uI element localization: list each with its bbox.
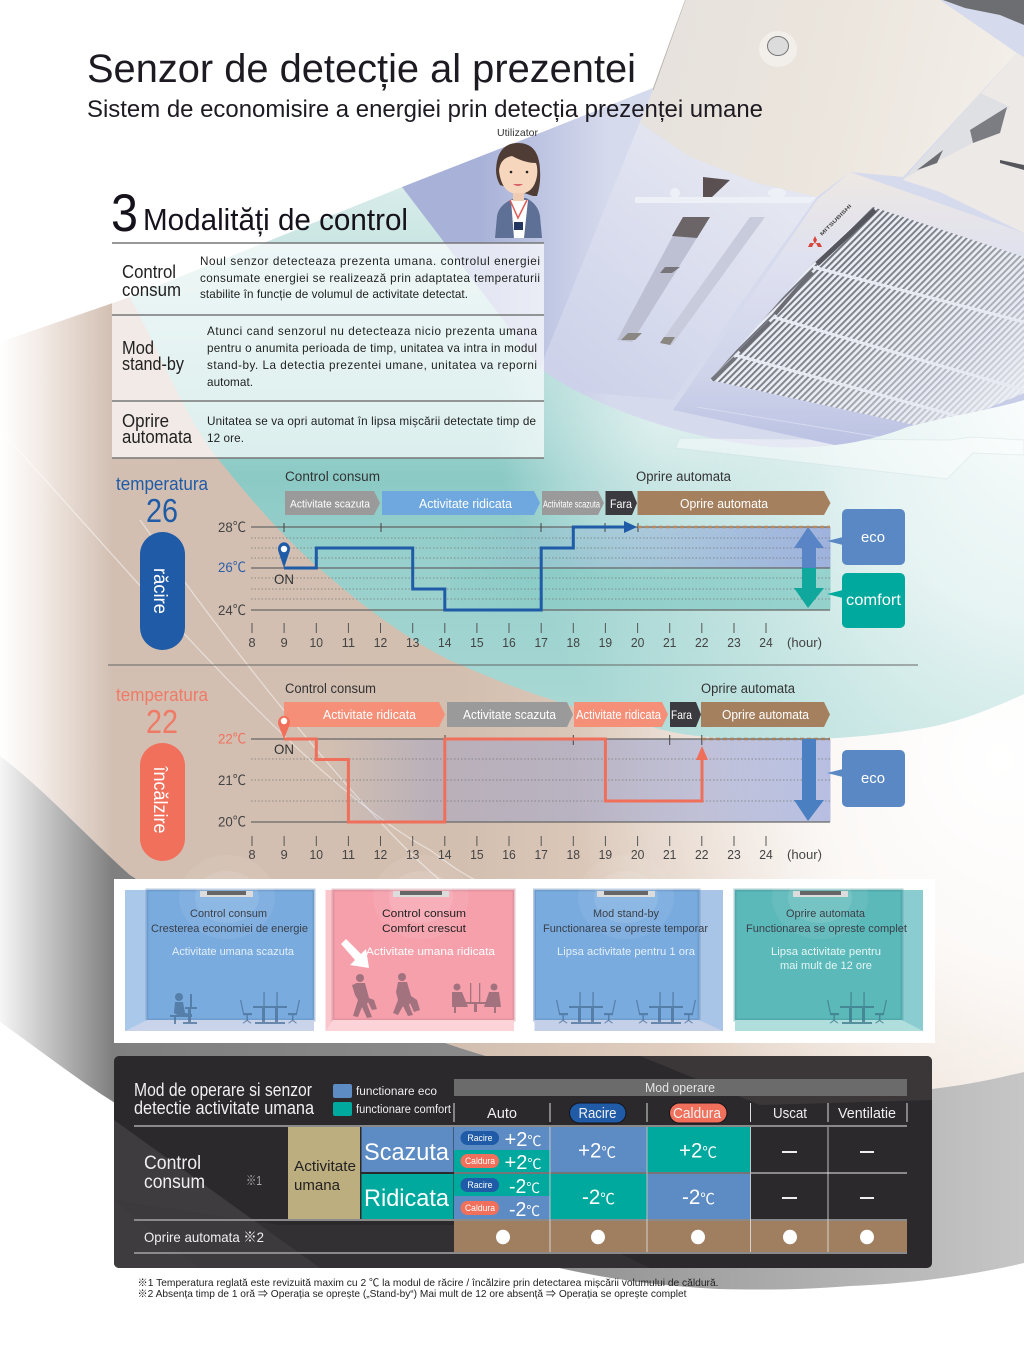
- row: control consum: Noul senzor detecteaza prezenta umana. controlul energiei: [200, 255, 540, 268]
- louver panel: [544, 122, 816, 382]
- logo: [808, 203, 854, 247]
- cooling and heating cells: +2℃: [679, 1140, 717, 1162]
- hour axis: 21: [663, 847, 676, 862]
- activity level cells: Scazuta: [364, 1139, 450, 1166]
- teal highlight below cone: [490, 250, 830, 590]
- meeting group: [452, 983, 501, 1013]
- beige highlight: [560, 330, 1024, 1100]
- lower face seams: [697, 406, 878, 437]
- header bar: mod operare: Mod operare: [645, 1080, 715, 1095]
- hour axis: 23: [727, 847, 741, 862]
- hour axis: 18: [567, 635, 580, 650]
- hour axis: 21: [663, 635, 676, 650]
- legend: functionare comfort: [356, 1104, 452, 1116]
- hour axis: 19: [599, 635, 612, 650]
- auto column cells: [454, 1127, 550, 1221]
- row: oprire automata: Oprire: [122, 411, 169, 431]
- hour axis: 12: [374, 635, 387, 650]
- label: temperature 22 heating: [116, 685, 209, 861]
- column headers: Caldura: [673, 1105, 722, 1122]
- hour axis: 24: [759, 635, 773, 650]
- grille cross bars: [735, 267, 1024, 425]
- table title: detectie activitate umana: [134, 1098, 315, 1118]
- footnotes: ※1 Temperatura reglată este revizuită maxim cu 2 ℃ la modul de răcire / încălzire prin detectarea mișcării volumului de căldură.: [138, 1277, 718, 1289]
- room: automatic stop: Oprire automata: [786, 908, 866, 920]
- on label: ON: [274, 741, 294, 757]
- auto column cells: -2℃: [509, 1176, 540, 1198]
- hour axis: (hour): [787, 635, 822, 650]
- hour axis: 10: [310, 847, 323, 862]
- header bar: mod operare: [454, 1079, 907, 1096]
- slot right: [660, 217, 765, 345]
- temperature step line: [284, 739, 708, 822]
- activity arrows: [284, 702, 830, 727]
- right cream panel: [903, 53, 1024, 233]
- callout: comfort: comfort: [846, 592, 902, 609]
- hour axis: 13: [406, 635, 419, 650]
- column headers: [454, 1103, 907, 1123]
- callout: comfort: [827, 573, 905, 628]
- chart headers: [285, 681, 795, 696]
- auto column cells: Racire: [468, 1133, 492, 1144]
- hour axis: 14: [438, 847, 452, 862]
- dark first slat: [817, 210, 875, 264]
- activity arrows: [285, 491, 830, 515]
- room: stand-by: Functionarea se opreste temporar: [543, 923, 708, 935]
- hour axis: 8: [248, 847, 256, 862]
- column headers: Ventilatie: [838, 1105, 896, 1122]
- auto column cells: +2℃: [504, 1129, 542, 1151]
- activity arrows: Activitate scazuta: [543, 500, 600, 510]
- panel: control modes table: [112, 243, 544, 458]
- top right dark interior: [943, 0, 1024, 25]
- activity level cells: Ridicata: [364, 1185, 450, 1212]
- label: temperature 26 cooling: răcire: [149, 568, 170, 614]
- temperature labels: 20℃: [218, 814, 246, 830]
- dashed brown line: [638, 526, 830, 528]
- label: temperature 22 heating: temperatura: [116, 685, 209, 705]
- logo: MITSUBISHI: [819, 203, 854, 237]
- dashed brown line: [702, 738, 830, 740]
- footnotes: ※2 Absența timp de 1 oră ⇒ Operația se oprește („Stand-by“) Mai mult de 12 ore absență ⇒ Operația se oprește complet: [138, 1288, 687, 1300]
- hour axis: 11: [342, 635, 355, 650]
- temperature labels: 21℃: [218, 772, 246, 788]
- hour axis: [248, 836, 822, 862]
- column headers: Racire: [578, 1105, 616, 1122]
- room: low activity: Control consum: [190, 908, 267, 920]
- row: oprire automata: Unitatea se va opri automat în lipsa mișcării detectate timp de: [207, 415, 536, 428]
- icon: user woman: [495, 143, 542, 238]
- row: mod stand-by: pentru o anumita perioada de timp, unitatea va intra in modul: [207, 342, 537, 355]
- hour axis: 14: [438, 635, 452, 650]
- chart headers: Control consum: [285, 681, 376, 696]
- human activity cell: [288, 1127, 360, 1219]
- main title: Senzor de detecție al prezentei: [87, 47, 636, 91]
- chart headers: [285, 469, 731, 484]
- row labels: ※1: [246, 1173, 262, 1188]
- cooling and heating cells: [550, 1127, 750, 1219]
- on label: ON: [274, 571, 294, 587]
- activity arrows: Activitate ridicata: [419, 496, 513, 511]
- temperature labels: 22℃: [218, 730, 246, 746]
- section heading: 3 control modes: 3: [111, 184, 138, 243]
- cooling and heating cells: -2℃: [582, 1186, 615, 1209]
- icon: on pin: [278, 716, 290, 739]
- row: control consum: Control: [122, 262, 176, 282]
- row labels: Control: [144, 1153, 201, 1174]
- temperature labels: [218, 519, 246, 618]
- arrow: eco comfort double arrow: [794, 527, 824, 608]
- activity arrows: Activitate ridicata: [323, 707, 417, 722]
- dark opening: [703, 177, 730, 197]
- temperature labels: 28℃: [218, 519, 246, 535]
- air conditioner cassette unit: [540, 0, 1024, 479]
- main face: [673, 172, 1024, 470]
- arrow: eco down arrow: [794, 739, 824, 821]
- legend: [333, 1084, 452, 1116]
- activity arrows: Oprire automata: [680, 496, 769, 511]
- oprire automata row: Oprire automata ※2: [144, 1229, 264, 1245]
- hour axis: 23: [727, 635, 741, 650]
- section heading: 3 control modes: Modalități de control: [143, 202, 408, 237]
- row labels: [144, 1153, 262, 1193]
- user label: Utilizator: [497, 127, 539, 139]
- hour axis: 20: [631, 635, 644, 650]
- footnotes: [138, 1277, 718, 1300]
- temperature step line: [284, 521, 637, 610]
- hour axis: 22: [695, 847, 709, 862]
- callout: eco: eco: [861, 530, 885, 546]
- lower lip: [675, 437, 1024, 479]
- row: oprire automata: [122, 411, 536, 447]
- room: automatic stop: [735, 855, 923, 1031]
- right panel slot: [905, 93, 1010, 178]
- eco band: [330, 739, 830, 822]
- row: oprire automata: 12 ore.: [207, 432, 244, 445]
- label: temperature 26 cooling: temperatura: [116, 474, 209, 494]
- activity arrows: Activitate scazuta: [290, 498, 371, 510]
- hour axis: 16: [502, 635, 516, 650]
- slot left: [617, 217, 710, 342]
- room: stand-by: Lipsa activitate pentru 1 ora: [557, 946, 696, 958]
- room: high activity: Comfort crescut: [382, 923, 466, 935]
- chart headers: Control consum: [285, 469, 380, 484]
- hour axis: 11: [342, 847, 355, 862]
- row labels: consum: [144, 1172, 205, 1193]
- temperature labels: [218, 730, 246, 830]
- room: high activity: [326, 855, 514, 1031]
- grille fade: [724, 218, 1024, 425]
- panel: room scenes: [114, 855, 935, 1043]
- section heading: 3 control modes: [111, 184, 408, 243]
- room: high activity: Activitate umana ridicata: [366, 946, 496, 958]
- walking people: [352, 973, 420, 1018]
- row: mod stand-by: stand-by: [122, 354, 184, 374]
- row: mod stand-by: stand-by. La detectia prezentei umane, unitatea va reporni: [207, 359, 537, 372]
- activity arrows: Fara: [671, 708, 692, 722]
- room: automatic stop: Lipsa activitate pentru: [771, 946, 881, 958]
- temperature labels: 26℃: [218, 559, 246, 575]
- row: mod stand-by: Atunci cand senzorul nu detecteaza nicio prezenta umana: [207, 325, 537, 338]
- callout: eco: [827, 509, 905, 565]
- white arcs: [0, 430, 530, 888]
- hour axis: 8: [248, 635, 256, 650]
- sensor: [759, 31, 797, 67]
- comfort and eco bands: [450, 527, 830, 610]
- auto column cells: Racire: [468, 1180, 492, 1191]
- row: mod stand-by: Mod: [122, 338, 154, 358]
- auto column cells: Caldura: [465, 1203, 496, 1214]
- auto column cells: +2℃: [504, 1152, 542, 1174]
- hour axis: 13: [406, 847, 419, 862]
- activity arrows: Activitate ridicata: [576, 707, 662, 722]
- louver knobs: [670, 188, 786, 198]
- cooling and heating cells: -2℃: [682, 1186, 715, 1209]
- hour axis: 12: [374, 847, 387, 862]
- column headers: Auto: [487, 1105, 517, 1122]
- hour axis: 9: [280, 635, 288, 650]
- row: control consum: consum: [122, 280, 181, 300]
- callout: eco: [827, 750, 905, 807]
- hour axis: (hour): [787, 847, 822, 862]
- chart headers: Oprire automata: [701, 681, 795, 696]
- room: automatic stop: Functionarea se opreste complet: [746, 923, 907, 935]
- row: control consum: stabilite în funcție de volumul de activitate detectat.: [200, 288, 468, 301]
- room: stand-by: Mod stand-by: [593, 908, 659, 920]
- row: mod stand-by: automat.: [207, 376, 253, 389]
- gray swoosh: [0, 756, 1024, 1290]
- row: mod stand-by: [122, 325, 537, 389]
- room: automatic stop: mai mult de 12 ore: [780, 960, 872, 972]
- hour axis: 15: [470, 847, 484, 862]
- panel: operating mode table: [114, 1056, 932, 1268]
- activity arrows: Oprire automata: [722, 707, 810, 722]
- icon: on pin: [278, 542, 290, 568]
- oprire automata row: [144, 1220, 907, 1252]
- row: control consum: [122, 255, 540, 301]
- auto column cells: Caldura: [465, 1156, 496, 1167]
- hour axis: [248, 623, 822, 650]
- louver frame bar: [635, 197, 817, 203]
- room: low activity: Cresterea economiei de energie: [151, 923, 308, 935]
- label: temperature 26 cooling: 26: [146, 492, 178, 529]
- hour axis: 17: [534, 847, 548, 862]
- subtitle: Sistem de economisire a energiei prin detecția prezenței umane: [87, 96, 763, 123]
- legend: functionare eco: [356, 1086, 437, 1098]
- temperature labels: 24℃: [218, 602, 246, 618]
- hour axis: 20: [631, 847, 644, 862]
- dash marks: [782, 1151, 874, 1199]
- lavender sensor cone: [402, 0, 1024, 448]
- teal wedge: [130, 140, 1024, 740]
- row: oprire automata: automata: [122, 427, 193, 447]
- room: low activity: Activitate umana scazuta: [172, 946, 295, 958]
- grid lines: [251, 735, 830, 822]
- teal fade to white: [480, 140, 1024, 740]
- beige swoosh: [0, 140, 1024, 1106]
- label: temperature 26 cooling: [116, 474, 209, 650]
- hour axis: 15: [470, 635, 484, 650]
- hour axis: 19: [599, 847, 612, 862]
- chart headers: Oprire automata: [636, 469, 731, 484]
- activity arrows: Activitate scazuta: [463, 707, 557, 722]
- human activity cell: umana: [294, 1177, 341, 1194]
- room: low activity: [125, 855, 314, 1031]
- table title: Mod de operare si senzor: [134, 1080, 312, 1100]
- label: temperature 22 heating: 22: [146, 703, 178, 740]
- chart: heating timeline: [218, 681, 905, 862]
- human activity cell: Activitate: [294, 1158, 356, 1175]
- hour axis: 17: [534, 635, 548, 650]
- room: stand-by: [534, 855, 723, 1031]
- table title: [134, 1080, 315, 1118]
- callout: eco: eco: [861, 771, 885, 787]
- row: control consum: consumate energiei se realizează prin adaptatea temperaturii: [200, 272, 540, 285]
- cooling and heating cells: +2℃: [578, 1140, 616, 1162]
- hour axis: 18: [567, 847, 580, 862]
- chart: cooling timeline: [218, 469, 905, 650]
- arrow: white pointer: [341, 939, 369, 968]
- top cream panel: [640, 0, 1017, 197]
- auto column cells: -2℃: [509, 1199, 540, 1221]
- activity arrows: Fara: [610, 497, 632, 511]
- column headers: Uscat: [773, 1105, 808, 1122]
- grille: [710, 207, 1024, 430]
- room: high activity: Control consum: [382, 908, 466, 920]
- panel edge line: [653, 0, 685, 90]
- hour axis: 22: [695, 635, 709, 650]
- hour axis: 10: [310, 635, 323, 650]
- grid lines: [251, 523, 830, 610]
- activity level cells: [362, 1127, 454, 1219]
- hour axis: 24: [759, 847, 773, 862]
- label: temperature 22 heating: încălzire: [149, 766, 170, 834]
- hour axis: 16: [502, 847, 516, 862]
- hour axis: 9: [280, 847, 288, 862]
